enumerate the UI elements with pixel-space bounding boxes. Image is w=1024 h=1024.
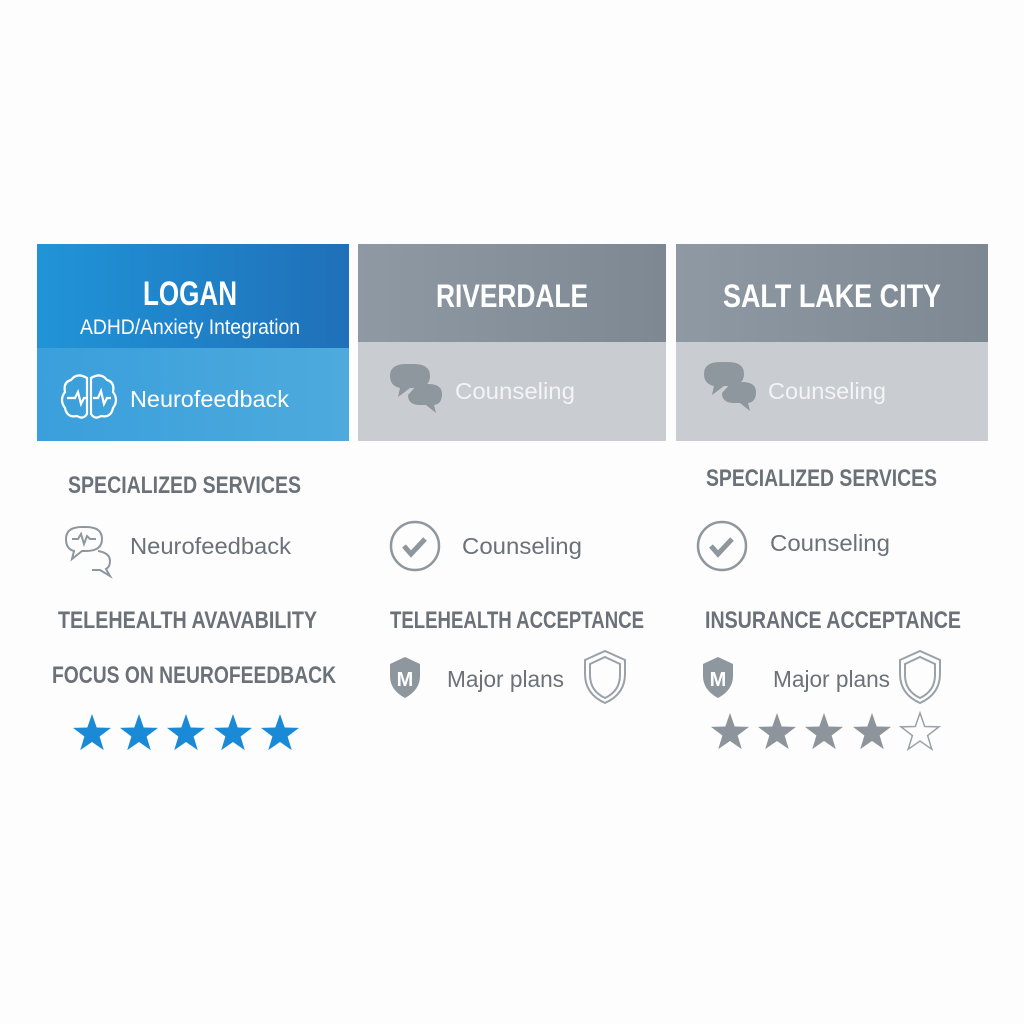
icon: shield outline bbox=[585, 651, 625, 703]
label: Counseling bbox=[770, 530, 890, 556]
icon: brain bbox=[62, 375, 116, 418]
label: Neurofeedback: Neurofeedback bbox=[130, 386, 290, 412]
rating: 5 stars bbox=[73, 714, 299, 750]
label: Counseling bbox=[462, 533, 582, 559]
heading: telehealth: TELEHEALTH AVAVABILITY bbox=[58, 607, 317, 634]
heading: specialized services: SPECIALIZED SERVICES bbox=[706, 465, 937, 492]
title: Logan: LOGAN bbox=[143, 275, 237, 313]
heading: specialized services: SPECIALIZED SERVICES bbox=[68, 472, 301, 499]
label: Neurofeedback bbox=[130, 533, 292, 559]
icon: check circle bbox=[391, 522, 439, 570]
label: Major plans bbox=[773, 666, 890, 692]
icon: shield outline bbox=[900, 651, 940, 703]
icon: M shield bbox=[703, 657, 733, 698]
icon: check circle bbox=[698, 522, 746, 570]
icon: M shield: M bbox=[710, 669, 726, 691]
icon: chat with pulse bbox=[66, 527, 110, 576]
subtitle: ADHD/Anxiety Integration bbox=[80, 316, 300, 339]
title: Salt Lake City: SALT LAKE CITY bbox=[723, 278, 941, 314]
heading: insurance acceptance: INSURANCE ACCEPTANCE bbox=[705, 607, 961, 634]
column: Riverdale details bbox=[390, 522, 644, 703]
icon: M shield: M bbox=[397, 669, 413, 691]
panel: Salt Lake City header bbox=[676, 244, 988, 441]
label: Counseling: Counseling bbox=[455, 378, 575, 404]
icon: chat bbox=[390, 364, 442, 413]
icon: chat bbox=[704, 362, 756, 411]
column: Salt Lake City details bbox=[698, 465, 961, 749]
title: Riverdale: RIVERDALE bbox=[436, 278, 588, 314]
label: Counseling: Counseling bbox=[768, 378, 886, 404]
heading: telehealth acceptance: TELEHEALTH ACCEPTANCE bbox=[390, 607, 644, 634]
icon: M shield bbox=[390, 657, 420, 698]
panel: Riverdale header bbox=[358, 244, 666, 441]
rating: 4 of 5 stars bbox=[711, 713, 939, 749]
panel: Logan header bbox=[37, 244, 349, 441]
heading: focus: FOCUS ON NEUROFEEDBACK bbox=[52, 662, 337, 689]
column: Logan details bbox=[52, 472, 337, 750]
label: Major plans bbox=[447, 666, 564, 692]
